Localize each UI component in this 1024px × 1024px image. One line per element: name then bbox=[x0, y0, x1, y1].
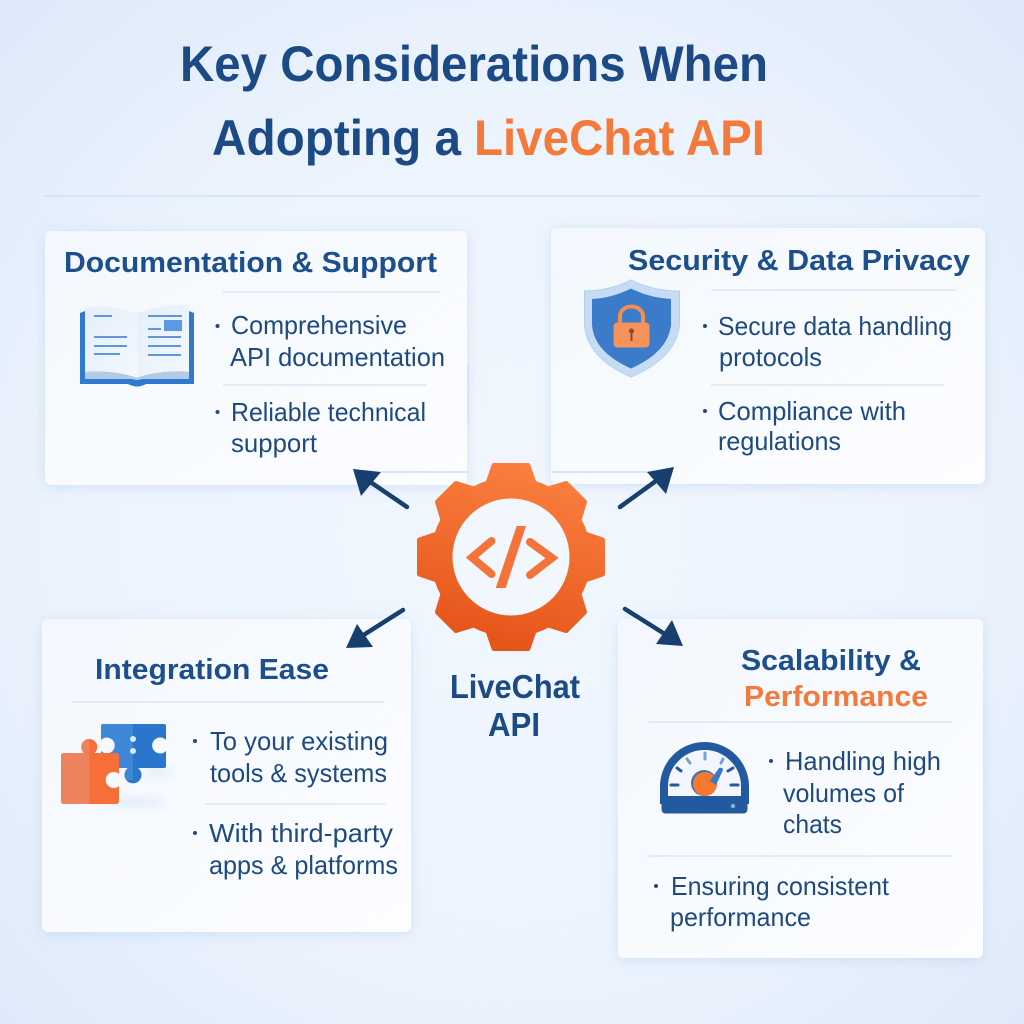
arrow: to scalability bbox=[625, 609, 683, 646]
title: Key Considerations When bbox=[180, 36, 768, 92]
panel: scalability and performance bbox=[618, 619, 983, 958]
arrow: to documentation bbox=[353, 469, 407, 507]
title bbox=[180, 36, 768, 166]
bullets: scalability and performance: Ensuring consistent bbox=[671, 871, 890, 901]
bullets: documentation and support: API documentation bbox=[230, 342, 445, 372]
bullets: scalability and performance: volumes of bbox=[783, 778, 905, 808]
heading: scalability and performance bbox=[741, 645, 928, 713]
heading: integration ease: Integration Ease bbox=[95, 654, 329, 686]
bullets: integration ease: apps & platforms bbox=[209, 850, 398, 880]
central label: LiveChat bbox=[450, 668, 580, 705]
bullets: documentation and support: Reliable technical bbox=[231, 397, 426, 427]
bullets: security and data privacy bbox=[703, 311, 952, 456]
central label bbox=[450, 668, 580, 743]
bullets: documentation and support: Comprehensive bbox=[231, 310, 407, 340]
bullets: scalability and performance bbox=[654, 746, 941, 932]
title: LiveChat API bbox=[474, 110, 765, 166]
panel: security and data privacy bbox=[551, 228, 985, 484]
bullets: security and data privacy: Compliance with bbox=[718, 396, 906, 426]
icon: central gear with code symbol bbox=[420, 466, 602, 648]
bullets: documentation and support bbox=[216, 310, 445, 458]
icon: speedometer gauge bbox=[662, 746, 748, 814]
bullets: documentation and support: support bbox=[231, 428, 318, 458]
bullets: scalability and performance: performance bbox=[670, 902, 811, 932]
bullets: security and data privacy: Secure data handling bbox=[718, 311, 952, 341]
icon: puzzle pieces bbox=[61, 724, 172, 806]
title: Adopting a bbox=[212, 110, 462, 166]
bullets: integration ease: With third-party bbox=[209, 818, 393, 848]
panel: integration ease bbox=[42, 619, 411, 932]
bullets: integration ease: tools & systems bbox=[210, 758, 387, 788]
heading: documentation and support: Documentation & Support bbox=[64, 247, 437, 279]
arrow: to integration bbox=[346, 610, 403, 648]
icon: shield with padlock bbox=[584, 280, 680, 377]
bullets: security and data privacy: regulations bbox=[718, 426, 841, 456]
icon: open book bbox=[80, 305, 194, 386]
heading: scalability and performance: Scalability & bbox=[741, 645, 921, 677]
heading: security and data privacy: Security & Data Privacy bbox=[628, 245, 970, 277]
heading: scalability and performance: Performance bbox=[744, 681, 928, 713]
bullets: scalability and performance: chats bbox=[783, 809, 842, 839]
panel: documentation and support bbox=[45, 231, 468, 485]
central label: API bbox=[488, 706, 540, 743]
bullets: integration ease bbox=[193, 726, 398, 880]
bullets: integration ease: To your existing bbox=[210, 726, 388, 756]
arrow: to security bbox=[620, 467, 674, 507]
bullets: security and data privacy: protocols bbox=[719, 342, 822, 372]
bullets: scalability and performance: Handling high bbox=[785, 746, 941, 776]
